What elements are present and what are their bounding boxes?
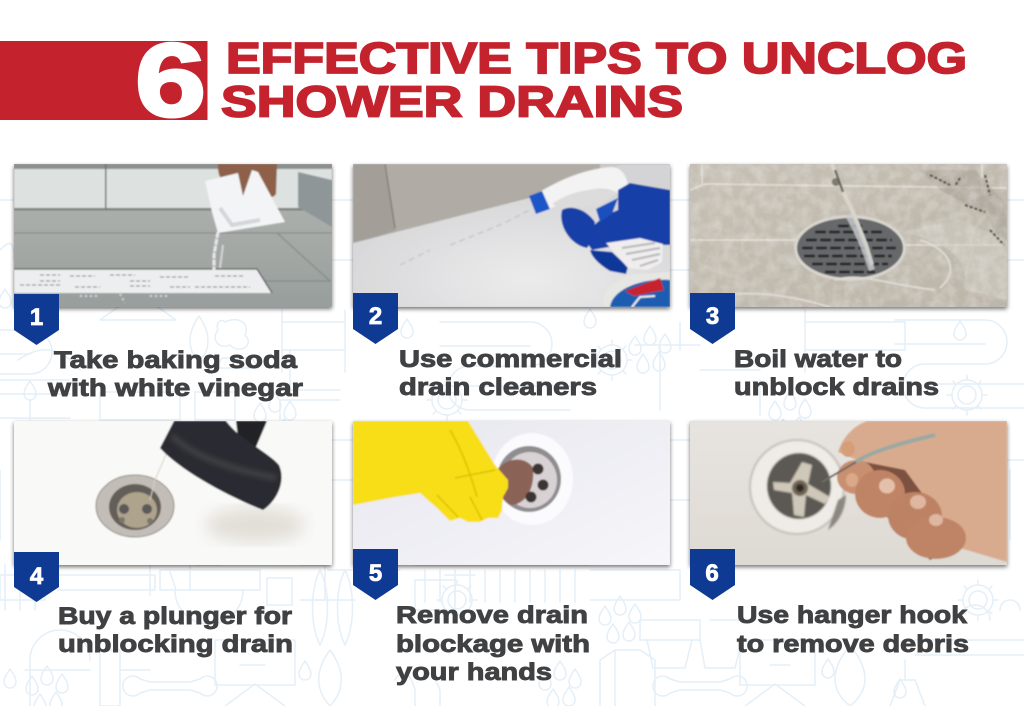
- tip 5 text: [396, 602, 590, 686]
- badge 1: 1: [30, 304, 43, 331]
- tip 6 text: to remove debris: [737, 631, 969, 658]
- badge 5: 5: [369, 560, 382, 587]
- badge 3: [690, 293, 735, 344]
- panel 5: hands removing blockage photo: [353, 421, 670, 565]
- tip 5 text: your hands: [396, 659, 552, 686]
- tip 3 text: unblock drains: [734, 374, 939, 401]
- panel 1: baking soda photo: [14, 164, 332, 307]
- badge 2: [353, 293, 398, 344]
- tip 1 text: [47, 347, 303, 402]
- header banner: [0, 23, 967, 139]
- badge 4: [14, 552, 59, 602]
- badge 6: [690, 549, 735, 600]
- panel 6: hanger hook photo: [690, 421, 1007, 565]
- badge 4: 4: [30, 563, 44, 590]
- panel 2: commercial cleaner photo: [353, 164, 670, 307]
- tip 5 text: Remove drain: [396, 602, 588, 629]
- tip 2 text: drain cleaners: [399, 374, 597, 401]
- badge 1: [14, 294, 59, 345]
- title: EFFECTIVE TIPS TO UNCLOG: [226, 34, 967, 83]
- panel 3: boiling water photo: [690, 164, 1007, 307]
- badge 5: [353, 549, 398, 600]
- badge 6: 6: [705, 560, 719, 587]
- tip 4 text: Buy a plunger for: [58, 603, 292, 630]
- background pattern: plumbing icons: [0, 200, 1024, 706]
- tip 4 text: unblocking drain: [58, 631, 293, 658]
- tip 3 text: [734, 346, 939, 401]
- tip 3 text: Boil water to: [734, 346, 902, 373]
- tip 2 text: Use commercial: [399, 346, 622, 373]
- tip 1 text: with white vinegar: [47, 375, 303, 402]
- panel 4: plunger photo: [14, 421, 332, 565]
- tip 2 text: [399, 346, 622, 401]
- big number 6: 6: [135, 23, 206, 139]
- tip 5 text: blockage with: [396, 631, 590, 658]
- tip 1 text: Take baking soda: [54, 347, 298, 374]
- title: [221, 34, 967, 126]
- tip 4 text: [58, 603, 293, 658]
- title: SHOWER DRAINS: [221, 78, 683, 126]
- badge 2: 2: [369, 303, 382, 330]
- tip 6 text: Use hanger hook: [737, 602, 968, 629]
- red banner bar: [0, 41, 208, 120]
- tip 6 text: [737, 602, 969, 658]
- badge 3: 3: [706, 303, 719, 330]
